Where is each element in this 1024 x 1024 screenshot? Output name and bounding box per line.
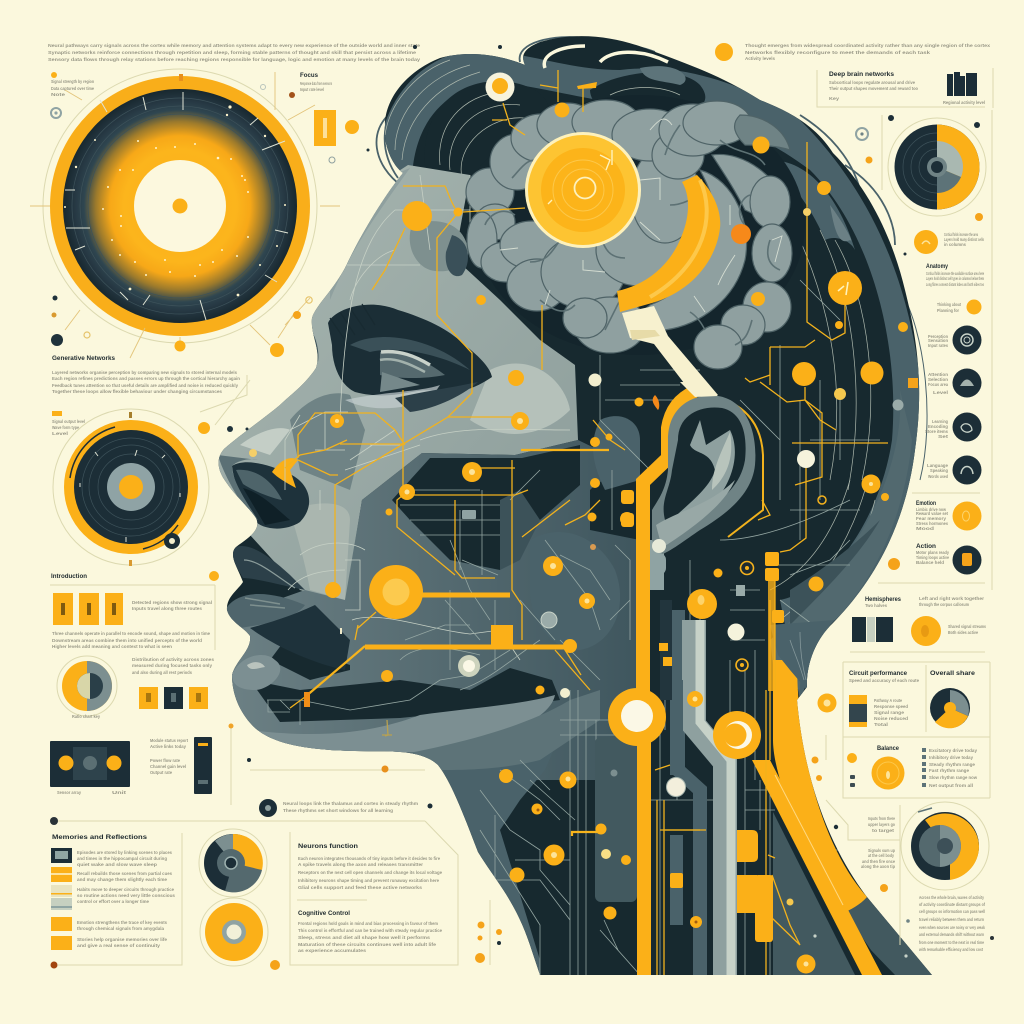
face facets	[410, 221, 468, 271]
top right text block	[413, 43, 991, 61]
panel: top right bar chart: Subcortical loops regulate arousal and drive	[829, 80, 915, 85]
chart: small pie: measured during focused tasks only	[132, 663, 212, 668]
heading: introduction with tiles: Three channels operate in parallel to encode sound, shape and motion in time	[52, 631, 210, 636]
heading: introduction with tiles	[50, 571, 219, 650]
icon list right column: in columns	[944, 242, 966, 247]
light circuit traces	[285, 175, 570, 660]
panel: bottom left legend: so routine actions need very little conscious	[77, 893, 175, 898]
chart: small pie	[57, 656, 214, 719]
icon list right column: Store items	[925, 429, 948, 434]
panel: top right bar chart: Key	[829, 96, 840, 101]
top left text block: Note	[51, 92, 66, 97]
lower face base	[220, 440, 640, 780]
top right text block: Networks flexibly reconfigure to meet the demands of each task	[745, 50, 931, 55]
notes beside lower neck: to target	[872, 828, 895, 833]
icon list right column: Words used	[928, 474, 948, 479]
icon list right column: Selection	[928, 377, 948, 382]
heading: cognitive systems: Each region refines predictions and passes errors up through the cortical hierarchy again	[52, 376, 240, 381]
notes beside lower neck: Inputs from there	[868, 816, 895, 821]
panel: paired boxes: Hemispheres	[865, 596, 901, 603]
gray triangle lower neck	[773, 812, 855, 975]
brain	[466, 95, 805, 396]
eyebrow and eye	[328, 305, 492, 395]
panel: bottom left legend: Stories help organise memories over life	[77, 937, 167, 942]
lips	[232, 546, 305, 590]
heading: introduction with tiles: Downstream areas combine them into unified percepts of the world	[52, 638, 202, 643]
icon list right column: Attention	[928, 372, 948, 377]
top middle labels	[300, 72, 332, 92]
panel: bottom left legend: Episodes are stored by linking scenes to places	[77, 850, 172, 855]
panel: paired boxes: Two halves	[865, 603, 887, 608]
icon list right column: Layers hold many distinct cells	[944, 237, 984, 242]
device panel: Sensor array	[57, 790, 81, 795]
panel: paired boxes: through the corpus callosum	[919, 602, 969, 607]
top middle labels: Response data from sensors	[300, 81, 332, 86]
callouts around sun disc	[30, 72, 340, 358]
bars	[947, 72, 977, 96]
icon list right column: Emotion	[916, 500, 936, 507]
panel: small disc report: Net output from all	[929, 783, 973, 788]
bottom right text: from one moment to the next in real time	[919, 940, 984, 945]
head silhouette illustration	[200, 20, 960, 990]
device panel: Channel gain level	[150, 764, 186, 769]
icon list right column: Balance held	[916, 560, 944, 565]
top left text block	[48, 43, 421, 97]
panel: small disc report: Excitatory drive today	[929, 748, 977, 753]
bottom right text: travel reliably between them and return	[919, 917, 984, 922]
notes beside lower neck: and then fire once	[862, 859, 895, 864]
nose shade	[232, 462, 309, 529]
icon list right column: Reward value set	[916, 511, 948, 516]
heading: cognitive systems: Wave form type	[52, 425, 79, 430]
neck columns	[678, 610, 700, 975]
chart: top right pie	[888, 118, 986, 216]
panel: bottom center text: Receptors on the next cell open channels and change its local voltage	[298, 870, 442, 875]
note with connector frame	[228, 724, 432, 817]
top left text block: Sensory data flows through relay stations before reaching regions responsible for language, logic and emotion at many levels of the brain today	[48, 57, 421, 62]
panel: bottom left legend: Recall rebuilds those scenes from partial cues	[77, 871, 172, 876]
notes beside lower neck: along the axon tip	[861, 864, 895, 869]
panel: bottom center text: This control is effortful and can be trained with steady regular practice	[298, 928, 442, 933]
panel: small disc report: Fast rhythm range	[929, 768, 969, 773]
panel: bottom left legend: Emotion strengthens the trace of key events	[77, 920, 167, 925]
notes beside lower neck: Signals sum up	[868, 848, 895, 853]
icon list right column: Stress hormones	[916, 521, 948, 526]
panel: paired boxes	[850, 596, 986, 652]
top left text block: Signal strength by region	[51, 79, 94, 84]
icon list right column: Focus area	[928, 382, 948, 387]
panel: bottom center text: Inhibitory neurons shape timing and prevent runaway excitation here	[298, 878, 439, 883]
device panel: Module status report	[150, 738, 188, 743]
dots beside neck	[475, 900, 502, 965]
chart: bottom yellow disc	[200, 898, 280, 970]
node circles	[508, 370, 524, 386]
chart: small pie: Ratio chart key	[72, 714, 100, 719]
panel: bottom left legend: and times in the hippocampal circuit during	[77, 856, 167, 861]
heading: cognitive systems: Generative Networks	[52, 355, 115, 362]
panel: mini report: Response speed	[874, 704, 908, 709]
panel: bottom left legend: Habits move to deeper circuits through practice	[77, 887, 174, 892]
top right text block: Thought emerges from widespread coordinated activity rather than any single region of the cortex	[745, 43, 991, 48]
notes beside lower neck	[826, 735, 900, 945]
panel: mini report: Circuit performance	[849, 670, 907, 677]
ear	[643, 392, 763, 700]
icon list right column: Fear memory	[916, 516, 946, 521]
panel: bottom center text: Sleep, stress and diet all shape how well it performs	[298, 935, 431, 940]
heading: cognitive systems: Level	[52, 431, 68, 436]
icon list right column: Level	[933, 390, 948, 395]
device panel: Output rate	[150, 770, 172, 775]
device panel: Power flow rate	[150, 758, 180, 763]
icon list right column: Speaking	[930, 468, 948, 473]
heading: introduction with tiles: Higher levels add meaning and context to what is seen	[52, 644, 172, 649]
bottom right text: with remarkable efficiency and low cost	[918, 947, 983, 952]
panel: paired boxes: Left and right work together	[919, 596, 984, 601]
panel: small disc report: Inhibitory drive today	[929, 755, 973, 760]
bottom right text: of activity coordinate distant groups of	[919, 902, 985, 907]
panel: paired boxes: Both sides active	[948, 630, 978, 635]
bottom right text: cell groups so information can pass well	[919, 909, 985, 914]
icon list right column: Input rates	[928, 343, 948, 348]
heading: introduction with tiles: Introduction	[51, 573, 87, 580]
note with connector frame: Neural loops link the thalamus and cortex in steady rhythm	[283, 801, 418, 806]
icon list right column: Cortical folds increase the area	[944, 232, 978, 237]
panel: mini report: Signal range	[874, 710, 904, 715]
gray wedge right neck	[845, 897, 932, 975]
heading: cognitive systems	[52, 355, 240, 436]
neck circuit grid	[480, 280, 905, 975]
chart: small pie: and also during all rest periods	[132, 670, 192, 675]
panel: bottom center text: Glial cells support and feed these active networks	[298, 885, 422, 890]
device panel: Unit	[112, 790, 127, 795]
panel: bottom center text: Cognitive Control	[298, 910, 350, 917]
panel: small disc report	[812, 737, 990, 798]
beam overlap at top of ear	[680, 382, 718, 397]
hair mass	[379, 50, 922, 700]
icon list right column: Limbic drive now	[916, 507, 946, 512]
icon: yellow tag and dot	[314, 110, 370, 163]
top right text block: Activity levels	[745, 56, 775, 61]
device panel: Active links today	[150, 744, 186, 749]
yellow crescent	[617, 175, 720, 312]
brain lobes	[466, 100, 792, 369]
panel: paired boxes: Shared signal streams	[948, 624, 986, 629]
panel: bottom center text: A spike travels along the axon and releases transmitter	[298, 862, 423, 867]
thin vertical gold traces	[655, 580, 800, 975]
brain lobe shading	[485, 125, 780, 345]
panel: small disc report: Balance	[877, 745, 899, 752]
hair dark swirl	[445, 82, 527, 102]
icon list right column: Mood	[916, 526, 934, 531]
icon list right column: Sensation	[928, 338, 948, 343]
dark circuit board panels on face	[392, 445, 580, 570]
icon: small ring top left	[51, 108, 61, 118]
chart: ringed dial	[53, 409, 209, 566]
connector lines left	[198, 375, 250, 434]
bottom right text: Across the whole brain, waves of activity	[919, 895, 984, 900]
panel: small disc report: Steady rhythm range	[929, 762, 975, 767]
panel: bottom center text	[290, 821, 458, 965]
top middle labels: Input rate level	[300, 87, 324, 92]
panel: mini report: Noise reduced	[874, 716, 908, 721]
panel: mini report: Speed and accuracy of each route	[849, 678, 919, 683]
heading: cognitive systems: Signal output level	[52, 419, 85, 424]
note with connector frame: These rhythms set short windows for all learning	[283, 808, 393, 813]
icon list right column: Motor plans ready	[916, 550, 949, 555]
head base	[200, 20, 960, 990]
loose hair strands	[376, 37, 927, 480]
heading: introduction with tiles: Inputs travel along three routes	[132, 606, 202, 611]
panel: top right bar chart: Regional activity level	[943, 100, 985, 105]
bottom right text: and external demands shift without warn	[919, 932, 984, 937]
heading: introduction with tiles: Detected regions show strong signal	[132, 600, 212, 605]
panel: bottom center text: Neurons function	[298, 843, 358, 850]
panel: bottom center text: as experience accumulates	[298, 948, 367, 953]
back of head gold traces and nodes	[565, 142, 918, 691]
yellow band	[773, 660, 867, 913]
icon list right column: Action	[916, 543, 936, 550]
panel: bottom left legend	[50, 817, 425, 968]
bottom right text	[906, 895, 994, 952]
panel: bottom left legend: quiet wake and slow wave sleep	[77, 862, 157, 867]
top left text block: Neural pathways carry signals across the cortex while memory and attention systems adapt to every new experience of the outside world and inner state	[48, 43, 420, 48]
panel: bottom left legend: control or effort over a longer time	[77, 899, 149, 904]
panel: mini report: Pathway A route	[874, 698, 902, 703]
icon list right column: Language	[927, 463, 948, 468]
heading: cognitive systems: Feedback tunes attention so that useful details are amplified and noise is reduced quickly	[52, 383, 238, 388]
yellow blocks	[737, 830, 758, 862]
gold forehead and temple traces	[335, 70, 597, 590]
chart: bottom pie	[199, 829, 267, 897]
icon list right column: Thinking about	[937, 302, 961, 307]
top left text block: Synaptic networks reinforce connections through repetition and sleep, forming stable patterns of thought and skill that persist across a lifetime	[48, 50, 417, 55]
chart: large radial sun disc	[43, 69, 317, 343]
device panel	[50, 737, 212, 795]
panel: bottom left legend: through chemical signals from amygdala	[77, 926, 164, 931]
notes beside lower neck: upper layers go	[868, 822, 895, 827]
panel: bottom center text: Frontal regions hold goals in mind and bias processing in favour of them	[298, 921, 438, 926]
icon list right column: Perception	[928, 334, 948, 339]
heading: cognitive systems: Layered networks organise perception by comparing new signals to stored internal models	[52, 370, 237, 375]
panel: top right bar chart	[817, 68, 993, 108]
panel: bottom left legend: and give a real sense of continuity	[77, 943, 160, 948]
panel: mini report: Overall share	[930, 670, 975, 677]
icon list right column: Set	[938, 434, 949, 439]
chart: bottom right pie	[901, 802, 989, 890]
cream beam	[622, 306, 718, 396]
icon list right column: Learning	[932, 419, 948, 424]
panel: bottom center text: Maturation of these circuits continues well into adult life	[298, 942, 436, 947]
icon list right column: Encoding	[928, 424, 948, 429]
panel: small disc report: Slow rhythm range now	[929, 775, 977, 780]
central sun	[525, 132, 641, 248]
upper face plane	[200, 165, 578, 605]
tiles: three small cards	[139, 687, 208, 709]
panel: bottom center text: Each neuron integrates thousands of tiny inputs before it decides to fire	[298, 856, 440, 861]
small marks right column	[856, 110, 992, 590]
panel: bottom left legend: Memories and Reflections	[52, 834, 147, 841]
notes beside lower neck: at the cell body	[868, 853, 894, 858]
icon list right column: Timing loops active	[916, 555, 949, 560]
brain dark bed	[475, 95, 805, 355]
face gold traces and nodes	[249, 370, 609, 736]
panel: mini report	[818, 662, 990, 737]
panel: top right bar chart: Their output shapes movement and reward too	[829, 86, 918, 91]
icon list right column: Anatomy	[926, 263, 948, 270]
icon list right column	[878, 230, 985, 583]
hair tip over band	[771, 622, 831, 688]
heading: cognitive systems: Together these loops allow flexible behaviour under changing circumstances	[52, 389, 222, 394]
top left text block: Data captured over time	[51, 86, 94, 91]
panel: top right bar chart: Deep brain networks	[829, 71, 894, 78]
panel: mini report: Total	[874, 722, 888, 727]
neck large nodes	[499, 688, 908, 975]
hair band right shade	[784, 162, 855, 250]
icon list right column: Planning for	[937, 308, 959, 313]
chart: small pie: Distribution of activity across zones	[132, 657, 214, 662]
top middle labels: Focus	[300, 72, 318, 79]
bottom right text: even when sources are noisy or very weak	[919, 925, 985, 930]
cream gaps in hair	[544, 46, 668, 68]
panel: bottom left legend: and may change them slightly each time	[77, 877, 167, 882]
brain nodes	[752, 136, 770, 154]
